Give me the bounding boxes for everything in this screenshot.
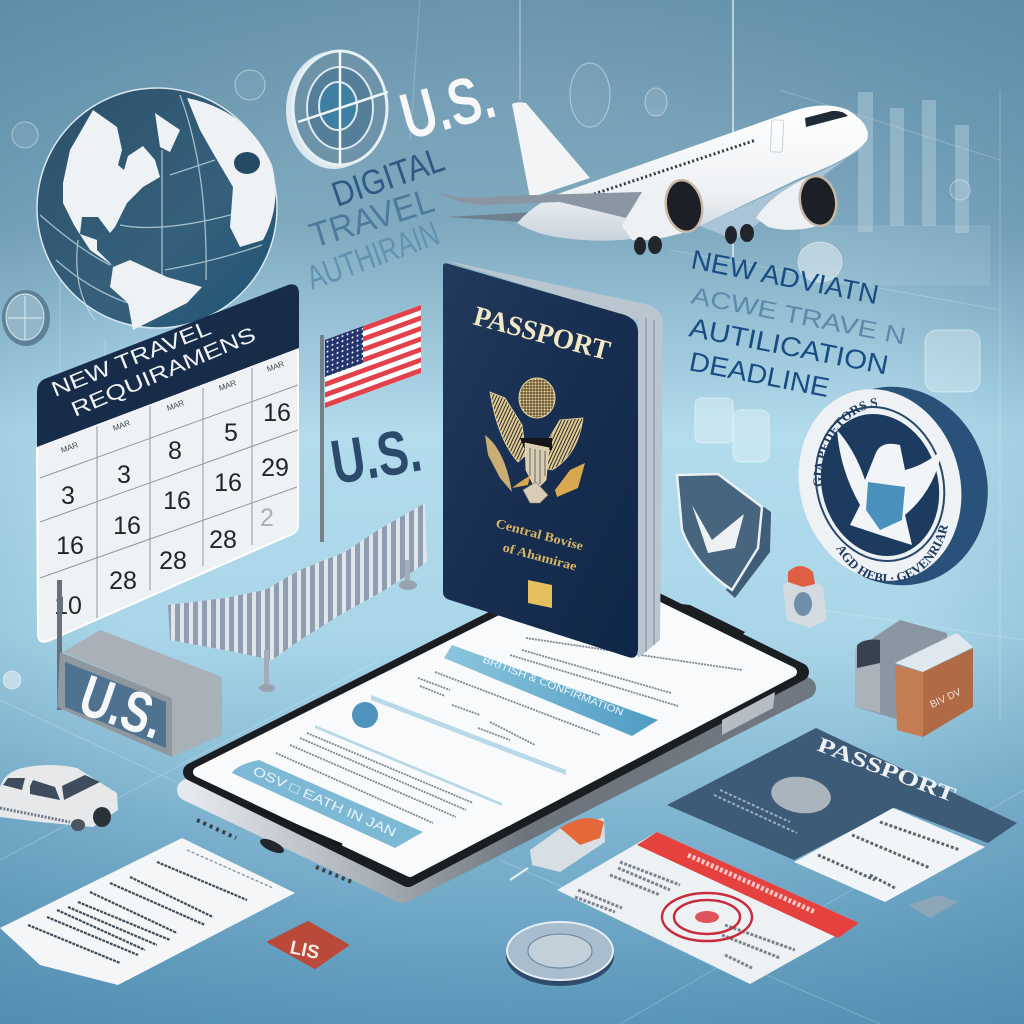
screen top banner: BRITISH & CONFIRMATION xyxy=(481,655,625,719)
calendar day labels: MAR xyxy=(112,418,132,433)
passport subtitle xyxy=(494,515,585,574)
seal eagle xyxy=(837,430,942,545)
eagle body xyxy=(520,438,552,450)
calendar dates: 16 xyxy=(214,469,242,497)
eagle head xyxy=(519,378,555,418)
main wing xyxy=(437,192,642,218)
heading: new authorization deadline: AUTILICATION xyxy=(687,312,891,380)
calendar day labels: MAR xyxy=(166,398,186,413)
passport subtitle: Central Bovise xyxy=(494,515,585,553)
calendar xyxy=(37,284,299,642)
screen bottom banner xyxy=(232,760,423,848)
heading: digital travel: TRAVEL xyxy=(305,181,439,256)
calendar day labels: MAR xyxy=(60,440,80,455)
calendar dates: 16 xyxy=(113,512,141,540)
calendar header title xyxy=(48,317,259,422)
heading: new authorization deadline xyxy=(687,244,908,403)
calendar header xyxy=(37,284,299,447)
phone bezel xyxy=(192,570,800,878)
faint background icons xyxy=(3,63,980,689)
heading: digital travel: DIGITAL xyxy=(327,140,449,215)
calendar dates xyxy=(54,399,291,620)
icon: small clip xyxy=(908,895,958,918)
icon: stamps: BIV DV xyxy=(929,687,963,711)
passport xyxy=(443,260,663,658)
cockpit window xyxy=(805,111,848,127)
calendar dates: 3 xyxy=(117,461,131,489)
heading: digital travel: AUTHIRAIN xyxy=(302,215,444,298)
tailplane xyxy=(447,211,552,222)
passport chip xyxy=(528,580,552,608)
cabin windows xyxy=(594,140,756,194)
seal ring text xyxy=(813,398,948,583)
calendar sheet xyxy=(37,348,298,642)
box front xyxy=(57,652,172,757)
phone notch xyxy=(663,602,745,640)
passport subtitle: of Ahamirae xyxy=(501,539,579,574)
calendar grid xyxy=(40,368,298,618)
globe dark detail xyxy=(234,152,260,174)
calendar day labels xyxy=(60,359,286,455)
box top xyxy=(895,633,973,672)
box left face xyxy=(895,665,923,737)
passport pages xyxy=(443,260,663,658)
calendar dates: 16 xyxy=(163,487,191,515)
background chart bars xyxy=(800,92,990,285)
screen bottom banner: OSV □ EATH IN JAN xyxy=(251,763,398,840)
box side xyxy=(172,677,222,757)
red tag xyxy=(268,922,348,968)
coin xyxy=(506,922,614,986)
red stamp xyxy=(662,893,752,941)
heading: digital travel xyxy=(302,140,449,298)
calendar dates: 29 xyxy=(261,454,289,482)
passport eagle xyxy=(485,378,585,503)
eagle tail xyxy=(523,482,548,503)
engine right xyxy=(756,173,840,230)
calendar dates: 3 xyxy=(61,482,75,510)
calendar day labels: MAR xyxy=(266,359,286,374)
calendar header title: REQUIRAMENS xyxy=(68,323,259,422)
shield icon xyxy=(677,474,771,598)
heading: middle U.S.: U.S. xyxy=(326,416,426,498)
box label: U.S. xyxy=(72,663,172,752)
document xyxy=(0,838,295,985)
phone speaker dots xyxy=(197,820,352,882)
phone body xyxy=(188,585,805,892)
landing gear xyxy=(634,224,754,255)
grey stamp xyxy=(855,620,947,720)
calendar dates: 16 xyxy=(263,399,291,427)
heading: new authorization deadline: DEADLINE xyxy=(687,346,832,403)
phone side button xyxy=(722,692,775,735)
icon: small globe badge xyxy=(2,290,50,346)
flag xyxy=(320,305,421,542)
eagle shield xyxy=(525,443,549,490)
seal ring text: AGD HEBI · GEVENRIAR xyxy=(836,526,948,583)
screen bars xyxy=(315,695,566,806)
calendar dates: 5 xyxy=(224,419,238,447)
eagle branches xyxy=(485,435,512,492)
flag cloth xyxy=(325,305,421,408)
official seal xyxy=(798,386,988,586)
engine left xyxy=(622,177,706,240)
eagle wings xyxy=(490,392,583,470)
icon: car xyxy=(0,765,118,831)
box: U.S. xyxy=(57,580,222,757)
fence xyxy=(168,503,427,692)
lower-right passport: PASSPORT xyxy=(814,732,959,807)
icon: small device xyxy=(510,818,605,880)
smartphone xyxy=(188,570,805,892)
passport title: PASSPORT xyxy=(470,301,614,367)
calendar dates: 2 xyxy=(260,504,274,532)
box right face xyxy=(923,648,973,737)
screen icon xyxy=(352,702,378,728)
globe xyxy=(37,88,277,330)
seal ring text: GIA PEDETORS S xyxy=(813,398,878,486)
globe land masses xyxy=(63,98,275,330)
visa sheet xyxy=(794,808,985,902)
phone home bar xyxy=(248,805,342,845)
fuselage underside xyxy=(700,145,865,240)
screen text lines xyxy=(276,638,742,823)
visa card xyxy=(557,832,859,984)
calendar dates: 10 xyxy=(54,592,82,620)
fuselage xyxy=(517,105,868,241)
icon: stamps xyxy=(855,620,973,737)
icon: bottle xyxy=(783,566,827,628)
passport cover xyxy=(443,263,638,658)
tail fin xyxy=(512,102,590,198)
phone port xyxy=(258,836,286,856)
calendar dates: 28 xyxy=(159,547,187,575)
lower-right passport xyxy=(667,728,1017,902)
globe grid lines xyxy=(40,95,265,320)
airplane xyxy=(437,102,868,255)
box top xyxy=(63,630,222,698)
calendar header title: NEW TRAVEL xyxy=(48,317,214,402)
target emblem xyxy=(286,50,388,169)
calendar dates: 28 xyxy=(209,526,237,554)
heading: new authorization deadline: NEW ADVIATN xyxy=(689,244,881,310)
screen top banner xyxy=(444,645,658,736)
red tag: LIS xyxy=(288,937,321,964)
phone screen xyxy=(198,574,792,872)
calendar dates: 28 xyxy=(109,567,137,595)
heading: new authorization deadline: ACWE TRAVE N xyxy=(689,282,908,350)
heading: top U.S.: U.S. xyxy=(392,58,502,154)
calendar dates: 16 xyxy=(56,532,84,560)
calendar day labels: MAR xyxy=(218,378,238,393)
flag pole xyxy=(320,335,324,542)
calendar dates: 8 xyxy=(168,437,182,465)
